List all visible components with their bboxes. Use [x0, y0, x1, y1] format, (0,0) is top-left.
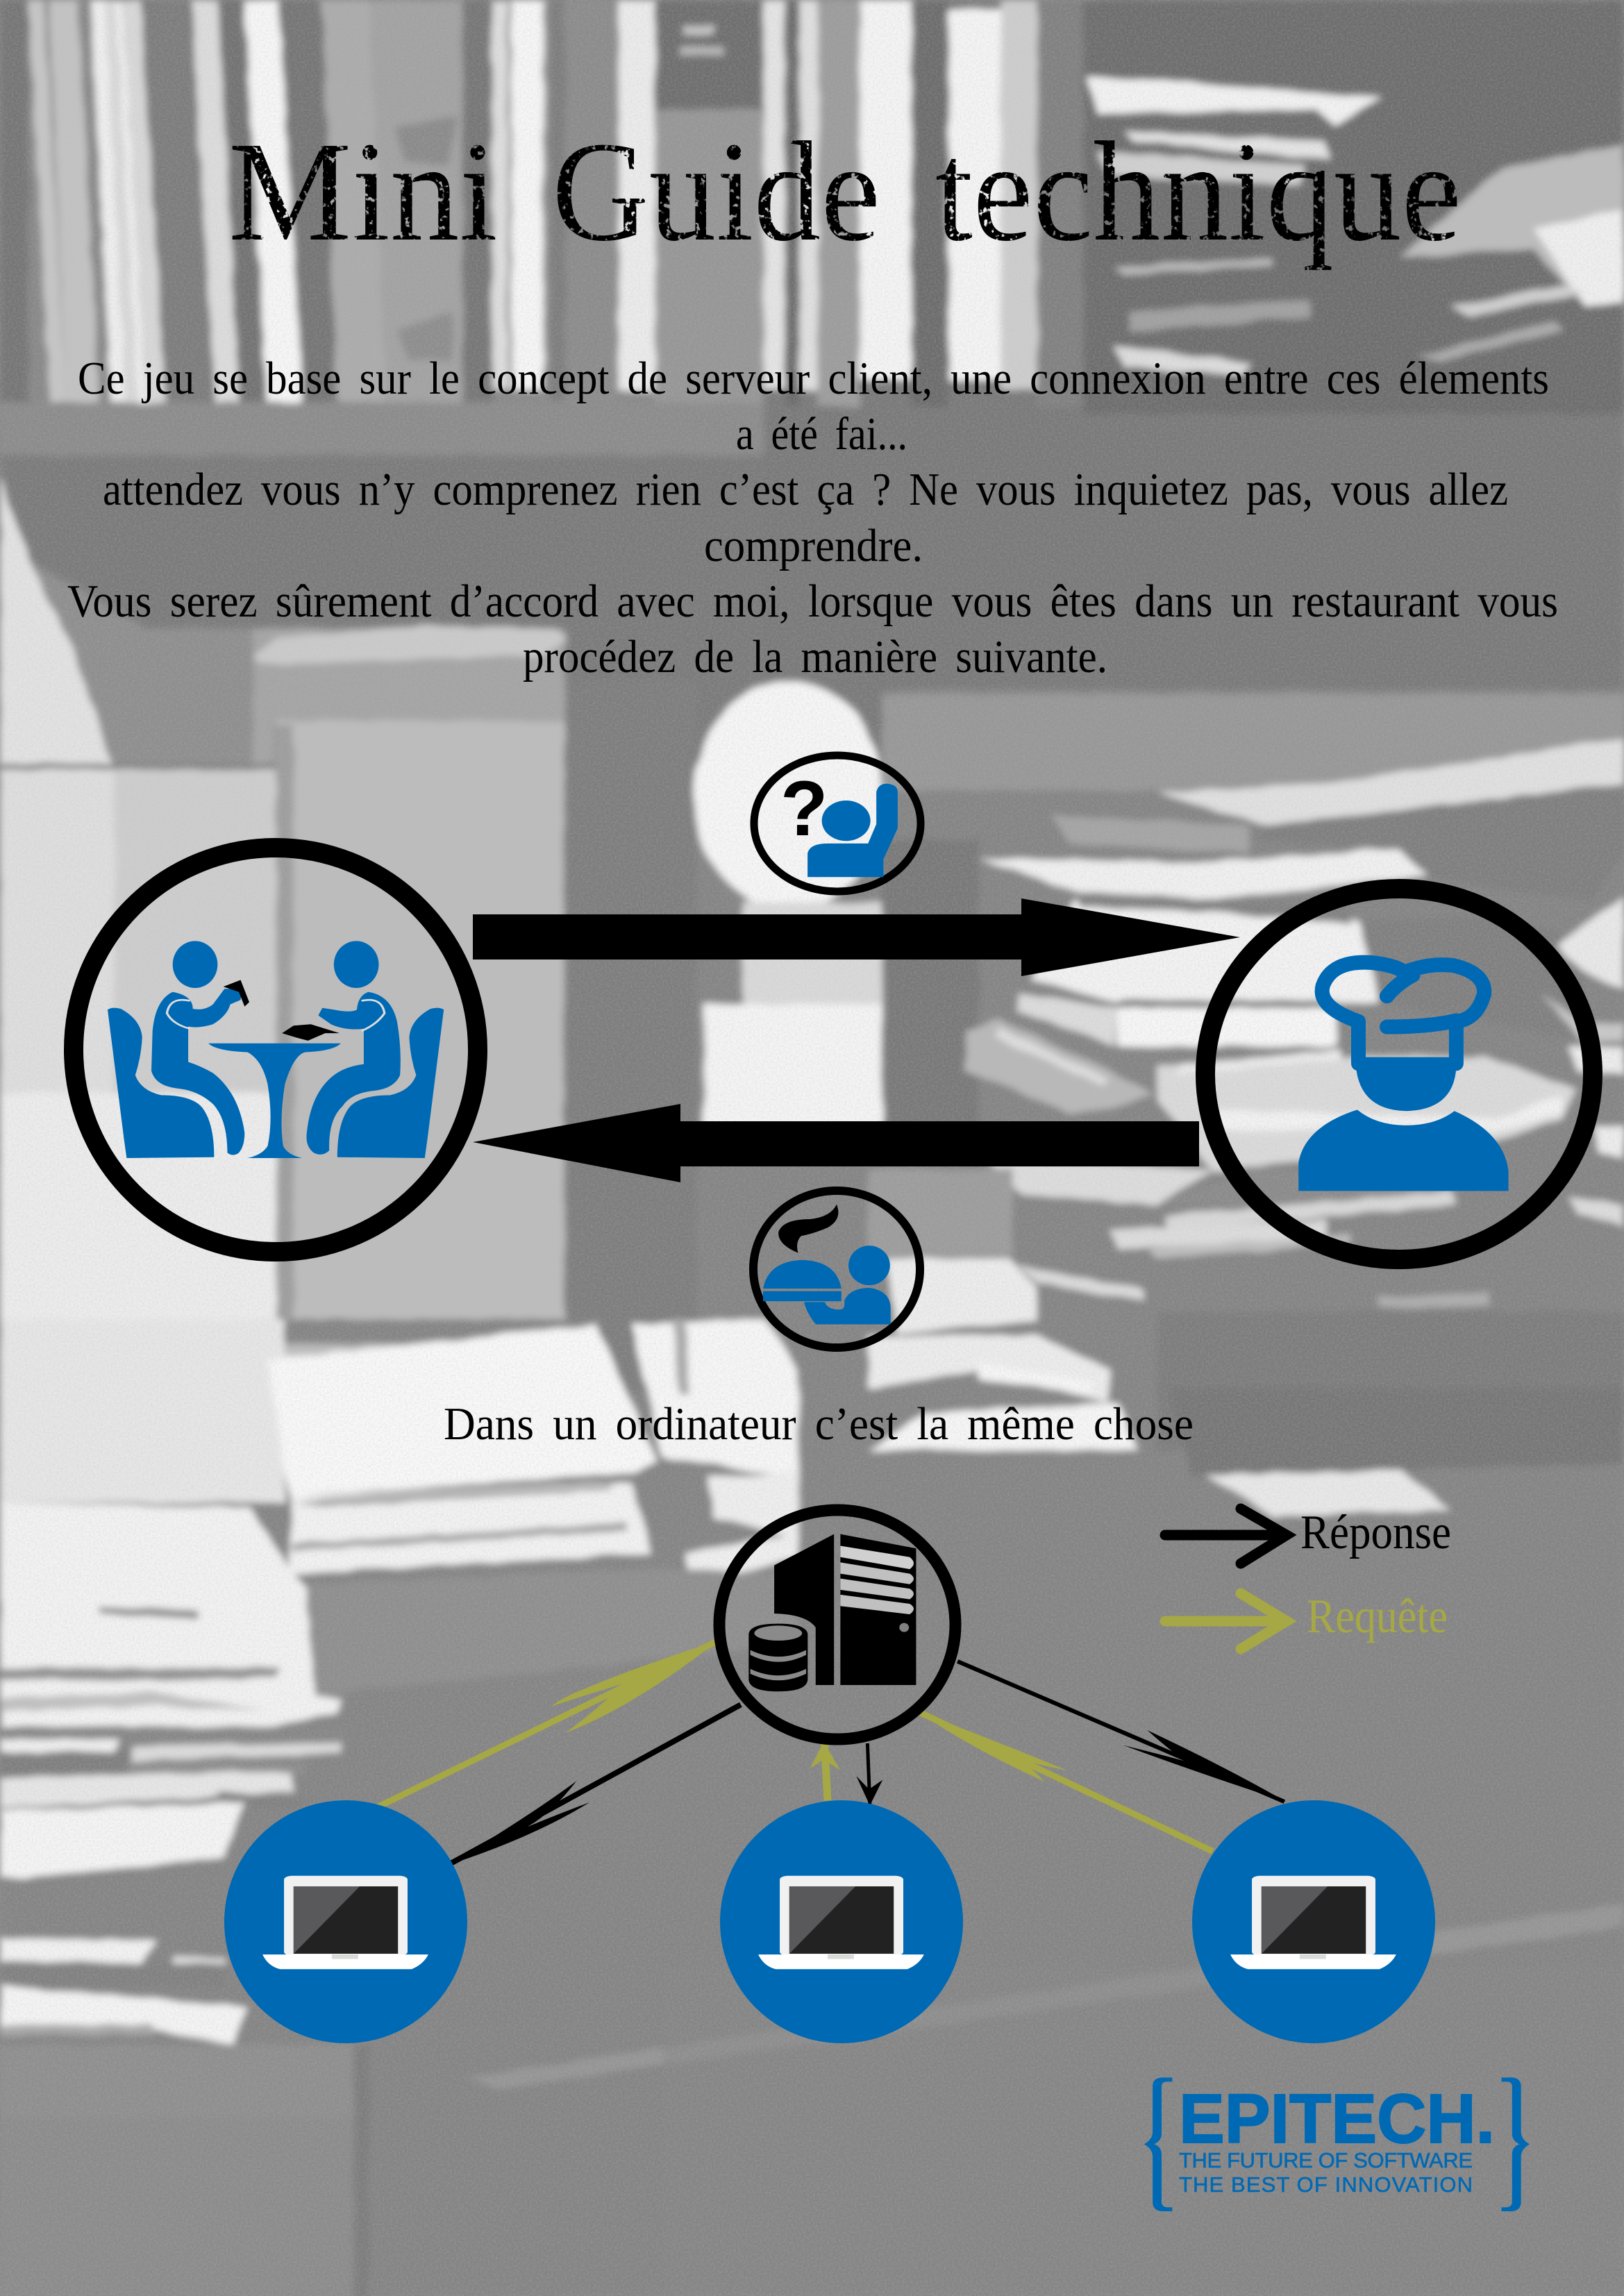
intro text block: attendez vous n’y comprenez rien c’est ça ? Ne vous inquietez pas, vous allez	[103, 464, 1508, 515]
icon: waiter carrying a hot dish	[753, 1191, 920, 1348]
logo: Epitech: THE BEST OF INNOVATION	[1179, 2172, 1473, 2197]
legend: request: Requête	[1307, 1590, 1448, 1643]
icon: client laptop right	[1192, 1800, 1435, 2043]
arrow: meal back to the table	[473, 1104, 1199, 1182]
icon: customer raising hand with question mark	[754, 755, 921, 891]
icon: chef	[1205, 889, 1593, 1259]
legend: response: Réponse	[1300, 1506, 1451, 1559]
intro text block: comprendre.	[704, 520, 923, 571]
arrow: order to the kitchen	[473, 898, 1240, 976]
icon: customer raising hand with question mark: ?	[780, 765, 828, 852]
icon: client laptop left	[224, 1800, 467, 2043]
logo: Epitech: EPITECH.	[1179, 2080, 1495, 2158]
logo: Epitech	[1144, 2077, 1530, 2211]
intro text block: procédez de la manière suivante.	[523, 631, 1107, 682]
legend: response	[1165, 1506, 1451, 1564]
icon: customers at a table	[74, 848, 478, 1252]
title: technique	[935, 112, 1462, 271]
icon: server with database	[719, 1510, 955, 1739]
legend: request	[1165, 1590, 1448, 1649]
logo: Epitech: THE FUTURE OF SOFTWARE	[1179, 2148, 1473, 2172]
text: same thing in a computer: Dans un ordinateur c’est la même chose	[444, 1398, 1194, 1450]
title: Guide	[552, 112, 880, 271]
intro text block: a été fai...	[736, 408, 907, 460]
network links between clients and server	[368, 1641, 1286, 1866]
icon: client laptop centre	[720, 1800, 963, 2043]
intro text block	[67, 353, 1558, 682]
title: Mini	[228, 112, 498, 271]
title	[228, 112, 1462, 271]
